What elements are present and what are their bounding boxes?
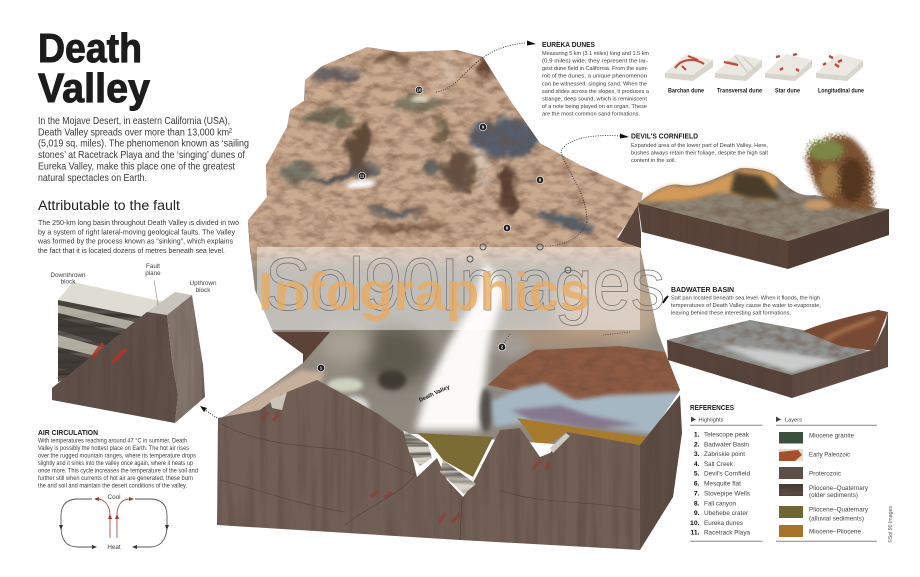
highlights list: 5.	[694, 470, 700, 478]
layers legend: Proterozoic	[809, 470, 842, 478]
highlights list: 2.	[694, 442, 700, 448]
dune labels: Transversal dune	[717, 88, 762, 94]
air circulation text: once more. This cycle increases the temperature of the soil and	[38, 468, 198, 474]
location markers: 9	[482, 125, 485, 130]
title: Death	[38, 25, 142, 71]
Eureka Dunes text: sand slides across the slopes, it produces a	[542, 89, 650, 95]
Eureka Dunes text: gest dune field in California. From the sum-	[542, 66, 648, 72]
front face	[52, 312, 178, 423]
salt surface	[667, 320, 888, 375]
air circulation diagram: Cool	[108, 494, 120, 501]
highlights list: Racetrack Playa	[704, 530, 750, 536]
Devil's Cornfield text: DEVIL'S CORNFIELD	[631, 132, 699, 140]
front face	[638, 203, 788, 269]
layers legend: Miocene granite	[809, 432, 854, 440]
layers legend: (alluvial sediments)	[809, 516, 864, 522]
highlights list: Highlights	[698, 418, 724, 424]
upthrown top	[147, 292, 192, 315]
fault block diagram	[52, 282, 205, 423]
layers legend: Pliocene–Quaternary	[809, 506, 869, 514]
highlights list: 1.	[694, 432, 700, 438]
right side rock face	[640, 395, 682, 550]
air circulation diagram: Heat	[107, 544, 121, 551]
terrain surface: northern plateau and southern valley	[222, 47, 680, 445]
air circulation text: Valley is possibly the hottest place on Earth. The hot air rises	[38, 445, 190, 452]
dune labels: Longitudinal dune	[818, 88, 864, 94]
highlights list: Telescope peak	[704, 432, 750, 438]
copyright: ©Sol 90 Images	[887, 505, 894, 543]
icon: star dune	[765, 54, 812, 81]
terrain side shadow	[248, 80, 320, 354]
fault text: by a system of right lateral-moving geological faults. The Valley	[38, 227, 235, 236]
bush	[806, 136, 875, 210]
references section	[690, 405, 877, 541]
Devil's Cornfield block	[617, 136, 889, 269]
layers legend	[776, 416, 877, 541]
location markers: 6	[506, 226, 509, 231]
olive alluvial sediments	[417, 433, 493, 477]
fault diagram labels: Fault	[146, 263, 160, 270]
highlights list: 9.	[694, 510, 700, 517]
fault diagram labels: plane	[145, 270, 161, 277]
Badwater Basin text	[671, 285, 821, 316]
Eureka Dunes text: (0.9 miles) wide, they represent the lar-	[542, 59, 648, 65]
dotted leader: Badwater Basin	[503, 296, 668, 344]
fault text: the fact that it is located dozens of metres beneath sea level.	[38, 246, 225, 255]
references heading: REFERENCES	[690, 405, 734, 412]
white strata at the valley walls	[270, 392, 570, 494]
highlights list: Zabriskie point	[704, 451, 745, 458]
white band over the terrain	[257, 247, 640, 330]
sediment layers	[58, 300, 148, 382]
valley and ranges beneath the band	[222, 255, 680, 444]
layers legend: Pliocene–Quaternary	[809, 485, 869, 492]
layers legend: Miocene–Pliocene	[809, 528, 861, 536]
location markers: 2	[501, 345, 504, 350]
Badwater Basin block	[667, 310, 888, 398]
fault marks in the front face	[262, 412, 550, 523]
Eureka Dunes text: are the most common sand formations.	[542, 112, 640, 118]
fault lines	[220, 424, 640, 540]
Eureka Dunes text: can be witnessed: singing sand. When the	[542, 81, 647, 87]
intro text	[38, 116, 249, 184]
highlights list: 4.	[694, 461, 700, 468]
highlights list: 3.	[694, 451, 700, 458]
intro text: Eureka Valley, make this place one of the greatest	[38, 161, 235, 172]
top surface of downthrown block	[58, 282, 165, 320]
intro text: In the Mojave Desert, in eastern California (USA),	[38, 116, 230, 127]
Eureka Dunes text: Measuring 5 km (3.1 miles) long and 1.5 km	[542, 51, 649, 57]
air circulation text: slightly and it sinks into the valley once again, where it heats up	[38, 460, 193, 467]
location markers: 8	[539, 178, 542, 183]
fault arrows	[92, 343, 103, 358]
rust slope	[803, 310, 888, 351]
intro text: Death Valley spreads over more than 13,000 km²	[38, 127, 233, 138]
fault text: was formed by the process known as “sinking”, which explains	[37, 237, 233, 246]
front face	[667, 340, 792, 398]
Eureka Dunes text	[542, 40, 650, 118]
ochre Miocene-Pliocene layer	[517, 418, 646, 445]
rock front face	[217, 380, 640, 550]
right face	[792, 312, 888, 398]
fault diagram labels: Upthrown	[190, 280, 217, 287]
Badwater Basin text: Salt pan located beneath sea level. When it floods, the high	[671, 296, 820, 302]
arrow from block to fault diagram	[200, 406, 217, 418]
right face	[788, 209, 889, 269]
main terrain block: Death Valley	[217, 47, 682, 550]
fault diagram labels: block	[61, 278, 76, 286]
connection to main block	[617, 205, 641, 248]
dotted leader: Devil's Cornfield	[543, 134, 629, 246]
highlights list: 7.	[694, 490, 700, 498]
air circulation diagram	[59, 494, 169, 551]
highlights list	[690, 416, 762, 541]
highlights list: 6.	[694, 480, 700, 488]
salt flat	[346, 178, 376, 190]
watermark: Infographics	[258, 262, 590, 322]
right face	[167, 295, 205, 423]
location markers	[317, 86, 571, 372]
Devil's Cornfield text	[631, 132, 768, 164]
highlights list: Devil's Cornfield	[704, 470, 750, 478]
highlights list: Mesquite flat	[704, 480, 741, 488]
highlights list: 11.	[690, 530, 700, 536]
icon: longitudinal dune	[816, 54, 863, 81]
fault diagram labels	[50, 263, 217, 305]
highlights list: Fall canyon	[704, 500, 736, 508]
title	[38, 25, 150, 111]
layers legend: Early Paleozoic	[809, 452, 851, 458]
heading: attributable to the fault: Attributable to the fault	[38, 197, 180, 213]
Devil's Cornfield text: content in the soil.	[631, 158, 676, 164]
Badwater Basin text: temperatures of Death Valley cause the water to evaporate,	[671, 303, 821, 309]
intro text: (5,019 sq. miles). The phenomenon known as ‘sailing	[38, 139, 249, 150]
dune type diagrams	[665, 54, 864, 94]
icon: transversal dune	[715, 54, 762, 81]
intro text: stones’ at Racetrack Playa and the ‘singing’ dunes of	[38, 150, 245, 161]
highlights list: Salt Creek	[704, 461, 734, 468]
Eureka Dunes text: EUREKA DUNES	[542, 40, 595, 49]
location markers: 11	[360, 174, 365, 179]
highlights list: Stovepipe Wells	[704, 490, 751, 498]
layers legend: Layers	[785, 418, 802, 424]
highlights list: Eureka dunes	[704, 520, 744, 527]
top surface	[638, 168, 889, 241]
location markers: 1	[320, 366, 323, 371]
highlights list: Badwater Basin	[704, 442, 749, 448]
dune labels	[668, 88, 864, 94]
watermark: Sol90Images	[265, 243, 665, 326]
plateau	[240, 40, 690, 460]
highlights list: 8.	[694, 500, 700, 508]
fault text: The 250-km long basin throughout Death Valley is divided in two	[38, 218, 239, 227]
sand mounds	[641, 169, 778, 202]
Badwater Basin text: BADWATER BASIN	[671, 285, 734, 294]
dark underside beneath the band	[273, 332, 330, 363]
title: Valley	[38, 65, 150, 111]
fault diagram labels: Downthrown	[50, 272, 86, 279]
highlights list: Ubehebe crater	[704, 510, 749, 517]
air circulation text: further still when currents of hot air are generated, these burn	[38, 475, 193, 482]
fault diagram labels: block	[196, 287, 211, 294]
Badwater Basin text: leaving behind these interesting salt formations.	[671, 310, 791, 316]
Devil's Cornfield text: bushes always retain their foliage, despite the high salt	[631, 150, 768, 156]
icon: barchan dune	[665, 54, 713, 81]
air circulation text: the arid soil and maintain the desert conditions of the valley.	[38, 482, 187, 490]
Eureka Dunes text: of a note being played on an organ. These	[542, 104, 647, 110]
fault text	[37, 218, 239, 255]
Eureka Dunes text: strange, deep sound, which is reminiscent	[542, 96, 647, 102]
valley name label: Death Valley	[418, 384, 452, 404]
Devil's Cornfield text: Expanded area of the lower part of Death Valley. Here,	[631, 143, 768, 149]
location markers: 10	[416, 88, 422, 93]
air circulation text: With temperatures reaching around 47 °C in summer, Death	[38, 436, 187, 444]
layers legend: (older sediments)	[809, 492, 858, 499]
dune labels: Barchan dune	[668, 88, 704, 94]
Eureka Dunes text: mit of the dunes, a unique phenomenon	[542, 74, 647, 80]
intro text: natural spectacles on Earth.	[38, 173, 147, 184]
air circulation text: AIR CIRCULATION	[38, 428, 98, 437]
air circulation text: over the rugged mountain ranges, where its temperature drops	[38, 452, 197, 460]
air circulation text	[38, 428, 198, 490]
highlights list: 10.	[690, 520, 700, 527]
dotted leader: Eureka Dunes	[436, 40, 536, 92]
dune labels: Star dune	[775, 88, 800, 94]
